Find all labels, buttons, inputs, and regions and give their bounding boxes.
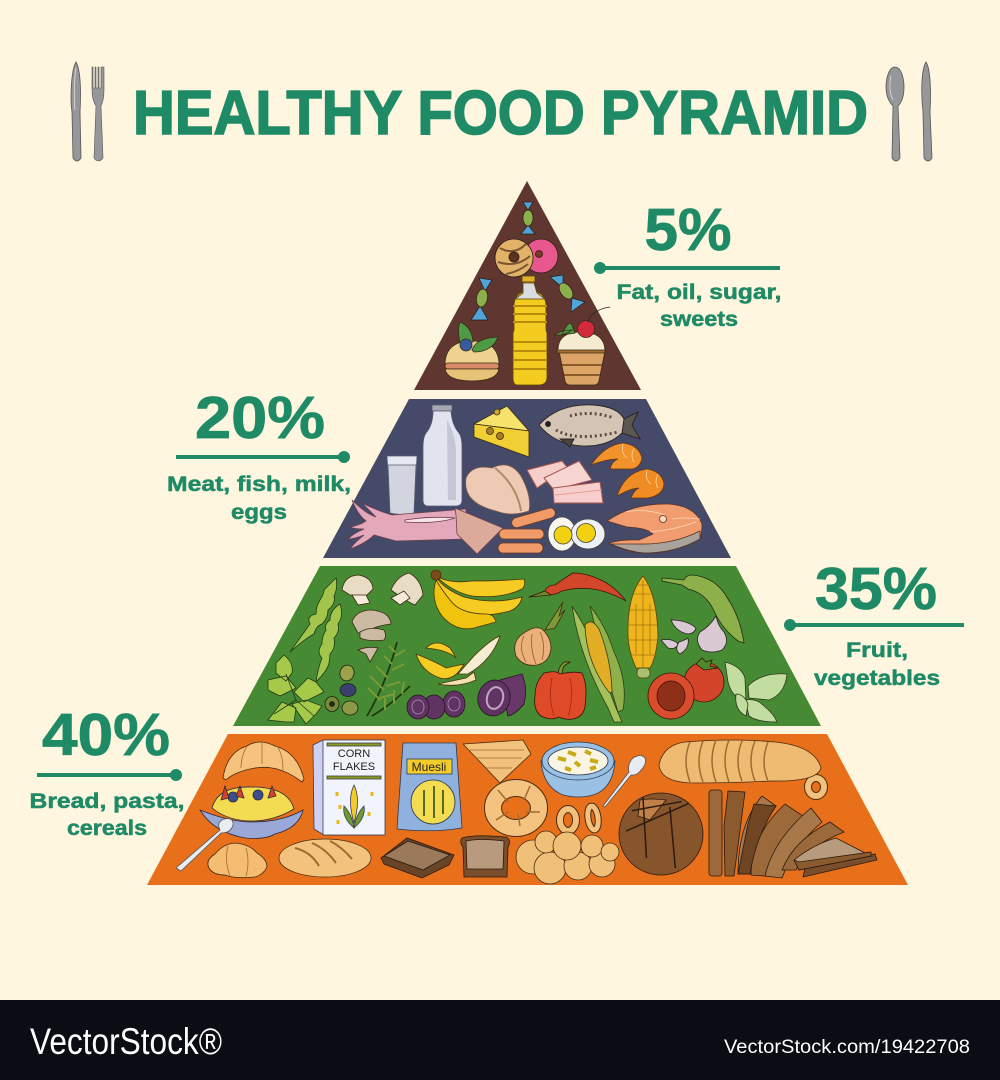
icon: corn flakes box: CORN <box>338 748 370 760</box>
pyramid tier: bread, pasta, cereals <box>147 734 908 885</box>
icon: small croissant <box>208 843 267 878</box>
icon: bread loaf <box>279 839 371 877</box>
icon: spoon in rice plate <box>176 819 233 871</box>
icon: boiled eggs <box>548 517 605 551</box>
callout: 35 percent: 35% <box>815 556 937 622</box>
icon: squid <box>348 500 503 554</box>
icon: oil bottle <box>513 276 547 385</box>
icon: mushrooms <box>342 573 423 605</box>
icon: sausages <box>498 507 556 553</box>
icon: round rye loaf <box>619 793 703 875</box>
icon: left candy <box>471 278 492 320</box>
icon: donuts <box>495 239 558 277</box>
icon: garlic <box>661 616 727 654</box>
callout: 5 percent: 5% <box>644 197 732 263</box>
icon: muesli pack: Muesli <box>412 760 446 774</box>
callout: 40 percent: 40% <box>42 702 170 768</box>
icon: toast slice <box>461 836 510 877</box>
icon: glass of milk <box>387 456 417 514</box>
icon: triangle pastry <box>463 740 531 783</box>
icon: purple onion slices <box>407 691 465 719</box>
pyramid tier: fats and sweets <box>414 181 641 390</box>
icon: shrimp 1 <box>591 443 642 469</box>
icon: shrimp 2 <box>617 469 664 498</box>
icon: left knife <box>71 62 81 161</box>
callout: 20 percent: Meat, fish, milk, <box>167 473 351 496</box>
icon: macaron with mint <box>445 322 499 381</box>
icon: dark bread slices <box>709 790 844 878</box>
icon: mint leaves <box>725 662 787 722</box>
icon: braided buns <box>516 831 619 884</box>
icon: cereal bowl <box>541 742 615 797</box>
callout: 5 percent: sweets <box>660 308 738 331</box>
icon: corn with husk <box>572 606 624 722</box>
icon: corn flakes box <box>313 740 385 835</box>
icon: salmon steak <box>607 504 702 553</box>
icon: rice plate with berries <box>200 786 303 838</box>
callout: 20 percent: 20% <box>195 385 325 451</box>
icon: cereal spoon <box>603 756 646 807</box>
callout: 40 percent <box>30 702 184 840</box>
icon: oyster mushrooms <box>352 610 391 662</box>
callout: 20 percent: eggs <box>231 501 287 524</box>
icon: rosemary <box>367 642 410 716</box>
icon: braided ring <box>493 786 540 828</box>
icon: brown bread slice <box>381 838 454 878</box>
icon: bananas <box>431 570 525 629</box>
icon: right candy <box>550 275 585 312</box>
callout: 5 percent: Fat, oil, sugar, <box>616 281 782 304</box>
icon: tomatoes <box>648 658 724 719</box>
pyramid tier: meat, fish, milk, eggs <box>323 399 731 558</box>
title: HEALTHY FOOD PYRAMID <box>133 79 868 148</box>
footer bar <box>0 1000 1000 1080</box>
icon: chicken breast <box>466 465 530 514</box>
icon: small rings <box>560 778 824 831</box>
icon: milk bottle <box>423 405 462 506</box>
icon: croissant <box>223 740 304 782</box>
icon: sliced baguette <box>659 740 821 783</box>
icon: bacon strips <box>527 461 603 503</box>
callout: 35 percent: vegetables <box>814 667 940 690</box>
footer brand: VectorStock® <box>30 1021 222 1062</box>
icon: red bell pepper <box>535 662 586 719</box>
icon: bread wedge <box>794 838 877 877</box>
icon: fork <box>92 67 104 161</box>
icon: arugula leaf 2 <box>316 604 342 682</box>
icon: parsley <box>268 655 324 724</box>
icon: peeled banana <box>416 636 500 685</box>
icon: arugula leaf 1 <box>290 578 337 652</box>
icon: corn cob <box>628 576 658 678</box>
callout: 35 percent <box>784 556 964 690</box>
icon: corn flakes box: FLAKES <box>333 761 375 773</box>
icon: top candy <box>521 202 535 234</box>
callout: 20 percent <box>167 385 351 524</box>
icon: right knife <box>922 62 932 161</box>
callout: 40 percent: Bread, pasta, <box>30 790 184 813</box>
callout: 40 percent: cereals <box>67 817 147 840</box>
icon: spoon <box>886 67 904 161</box>
pyramid tier: fruit and vegetables <box>233 566 821 726</box>
icon: cupcake <box>554 307 610 385</box>
callout: 5 percent <box>594 197 782 331</box>
icon: muesli pack <box>397 743 462 831</box>
icon: fish <box>539 405 640 447</box>
icon: olives <box>325 663 358 715</box>
callout: 35 percent: Fruit, <box>846 639 908 662</box>
icon: onion <box>515 602 565 665</box>
icon: purple onion half <box>474 674 526 720</box>
icon: green pepper <box>662 575 744 643</box>
footer image id: VectorStock.com/19422708 <box>724 1037 970 1058</box>
icon: cheese wedge <box>474 406 529 457</box>
icon: chili pepper <box>529 573 626 601</box>
